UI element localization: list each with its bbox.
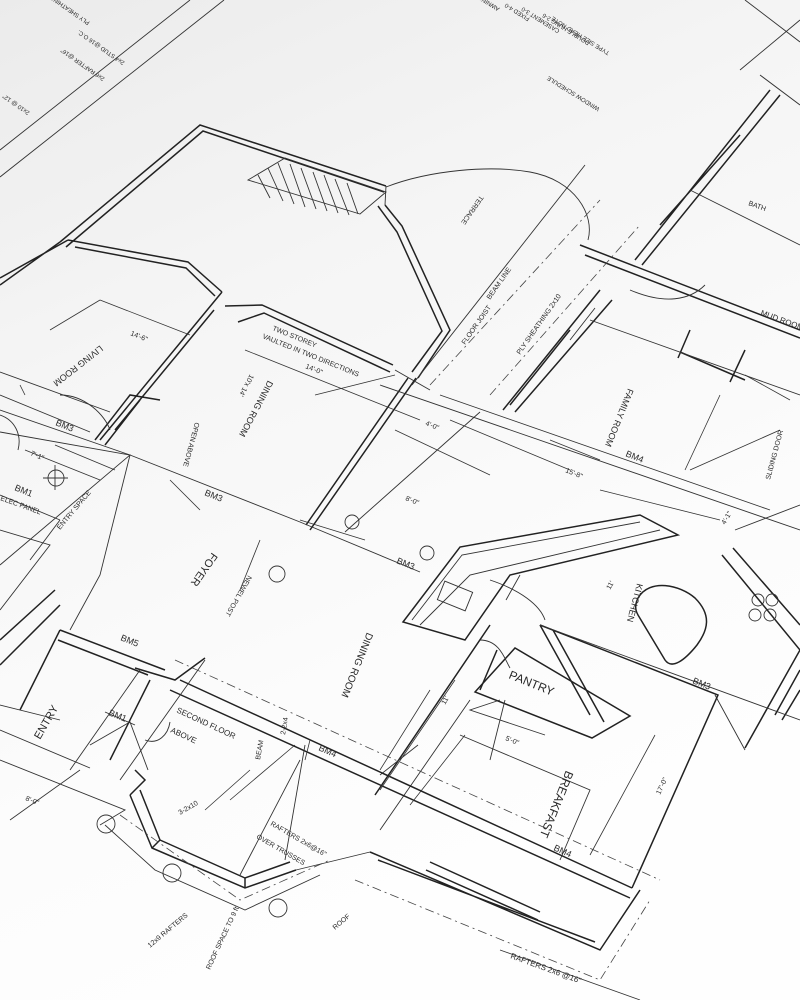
handwritten notes: BEAM LINE <box>486 266 513 301</box>
dimension figures: 4'-0" <box>424 420 440 432</box>
handwritten notes: 3-2x10 <box>178 800 200 817</box>
curved terrace line <box>386 169 589 240</box>
foyer and entry <box>0 455 285 825</box>
handwritten notes: SLIDING DOOR <box>765 429 785 481</box>
room label: pantry: PANTRY <box>507 668 556 699</box>
room label: entry: ENTRY <box>32 703 61 742</box>
wall: rear bay <box>0 125 589 378</box>
room label: foyer: FOYER <box>188 550 219 588</box>
dimension figures: 4'-1" <box>721 510 734 526</box>
room label: dining room lower: DINING ROOM <box>338 631 374 699</box>
handwritten notes: 2-2x4 <box>280 717 290 735</box>
room label: living room: LIVING ROOM <box>51 343 105 388</box>
wall: dining to kitchen <box>130 370 800 572</box>
top left notes: 2x6 RAFTER @16" <box>60 47 106 81</box>
top left notes: 2x10 @ 12" <box>2 92 31 115</box>
dimension figures: 11' <box>441 695 451 706</box>
top left notes: 2x4 STUD @16 O.C. <box>76 28 126 65</box>
handwritten notes: 12x9 RAFTERS <box>147 912 190 950</box>
room label: family room: FAMILY ROOM <box>603 387 635 448</box>
handwritten notes: SECOND FLOOR <box>175 706 237 741</box>
stairs <box>248 158 386 215</box>
wall: family room <box>412 20 800 530</box>
handwritten notes: BEAM <box>255 739 265 760</box>
room label: breakfast: BREAKFAST <box>536 769 576 840</box>
handwritten notes: PLY SHEATHING 2x10 <box>516 293 563 356</box>
south bay window <box>97 745 370 917</box>
handwritten notes: RAFTERS 2x6@16" <box>269 821 328 859</box>
beam labels: BM4 <box>552 843 573 859</box>
sheet border lines <box>0 0 800 177</box>
handwritten notes: BATH <box>747 200 767 213</box>
dimension figures: 8'-0" <box>24 795 40 807</box>
room label: kitchen: KITCHEN <box>625 582 645 623</box>
dimension figures: 14'-6" <box>129 330 149 344</box>
top left notes <box>2 0 126 115</box>
handwritten notes: ELEC PANEL <box>0 495 42 517</box>
dimension figures: 5'-0" <box>504 735 520 747</box>
beam labels: BM4 <box>317 743 338 759</box>
beam labels: BM1 <box>107 708 128 724</box>
dimension figures: 15'-8" <box>564 467 584 481</box>
handwritten notes: RAFTERS 2x6 @16" <box>509 951 583 985</box>
handwritten notes: NEWEL POST <box>223 574 252 618</box>
beam labels <box>13 418 712 859</box>
beam labels: BM1 <box>13 483 34 499</box>
kitchen right counter with sink <box>715 548 800 750</box>
handwritten notes: ROOF SPACE TO 9 ft <box>205 906 241 971</box>
beam labels: BM3 <box>395 556 416 572</box>
dimension figures: 14'-0" <box>304 363 324 377</box>
dimension figures: 11' <box>606 580 616 591</box>
kitchen island <box>636 585 707 664</box>
top notes: window schedule: FIXED 4-0 <box>504 1 531 21</box>
handwritten notes: ABOVE <box>169 726 198 745</box>
kitchen counter <box>403 515 678 640</box>
handwritten notes: OVER TRUSSES <box>255 834 306 867</box>
dimension figures: 8'-0" <box>404 495 420 507</box>
handwritten notes <box>0 194 800 985</box>
top notes: window schedule: TYPE SIZE HEAD NOTE <box>551 15 611 55</box>
beam labels: BM3 <box>54 418 75 434</box>
beam labels: BM4 <box>624 449 645 465</box>
room label: dining room upper: DINING ROOM <box>237 379 275 438</box>
dimension figures: 7'-1" <box>29 450 45 462</box>
handwritten notes: 10'x 14' <box>237 373 254 397</box>
dimension figures <box>24 330 734 807</box>
beam labels: BM3 <box>203 488 224 504</box>
pantry <box>375 625 630 795</box>
top notes: window schedule: DOUBLE HUNG 2-6 <box>541 11 591 45</box>
top notes: window schedule: CASEMENT 3-0 <box>520 5 561 33</box>
beam labels: BM3 <box>691 676 712 692</box>
handwritten notes: OPEN ABOVE <box>181 421 200 468</box>
wall: living room left <box>0 292 222 565</box>
handwritten notes: TWO STOREY <box>271 325 318 350</box>
handwritten notes: ENTRY SPACE <box>56 489 93 531</box>
living room door and left structure <box>0 395 160 610</box>
handwritten notes: FLOOR JOIST <box>461 304 493 346</box>
top notes: window schedule <box>468 0 611 111</box>
beam labels: BM5 <box>119 633 140 649</box>
dimension figures: 17'-0" <box>655 776 670 796</box>
handwritten notes: TERRACE <box>459 194 484 226</box>
handwritten notes: ROOF <box>332 913 352 932</box>
handwritten notes: VAULTED IN TWO DIRECTIONS <box>261 333 360 379</box>
top notes: window schedule: WINDOW SCHEDULE <box>546 74 601 111</box>
dimension lines <box>10 300 790 1000</box>
breakfast walls <box>380 625 800 888</box>
main beam and south wall <box>170 660 660 980</box>
